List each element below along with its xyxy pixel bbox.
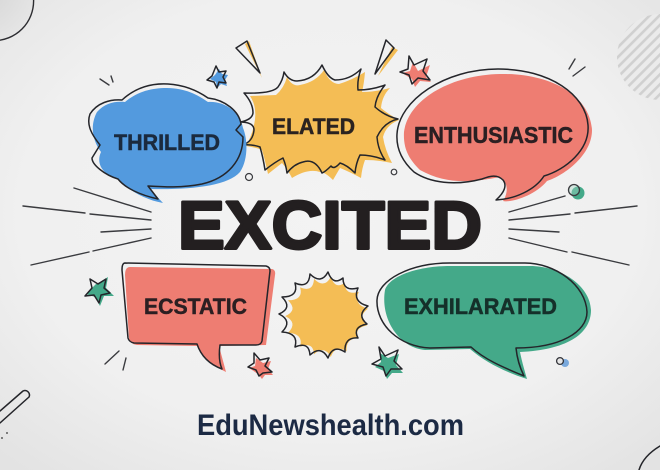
ring and dot: green <box>568 184 584 200</box>
label: exhilarated: EXHILARATED <box>404 294 557 319</box>
speech bubble: ecstatic <box>122 263 275 372</box>
tick marks: top-right <box>569 59 585 76</box>
cloud bubble: thrilled <box>89 84 246 203</box>
label: thrilled: THRILLED <box>114 130 220 155</box>
label: enthusiastic: ENTHUSIASTIC <box>414 122 573 148</box>
star: green bottom <box>372 347 403 379</box>
starburst: elated <box>240 65 399 180</box>
star: coral bottom <box>248 353 273 379</box>
starburst: yellow <box>279 272 368 358</box>
title: EXCITED <box>178 188 482 264</box>
label: ecstatic: ECSTATIC <box>144 294 247 319</box>
burst lines: right <box>509 196 637 265</box>
tick marks: bottom-left <box>105 351 126 370</box>
tick marks: top-left <box>100 76 113 85</box>
speech bubble: enthusiastic <box>397 69 592 201</box>
label: elated: ELATED <box>272 114 355 139</box>
speech bubble: exhilarated <box>377 263 591 379</box>
small ring: right <box>391 169 397 175</box>
decoration: hatched circle <box>617 14 660 100</box>
website footer: EduNewshealth.com <box>197 409 464 442</box>
decoration: top-left circle <box>0 0 34 41</box>
spike: yellow right <box>375 40 398 76</box>
burst lines: left <box>23 188 151 265</box>
decoration: bottom-right arc <box>639 446 660 470</box>
spike: yellow left <box>236 41 262 78</box>
decoration: bottom-left capsule <box>0 391 29 439</box>
small ring: left <box>246 174 252 180</box>
star: coral top <box>400 56 431 87</box>
star: blue <box>207 66 228 88</box>
ring and dot: blue <box>557 358 569 367</box>
star: green left <box>85 277 114 306</box>
